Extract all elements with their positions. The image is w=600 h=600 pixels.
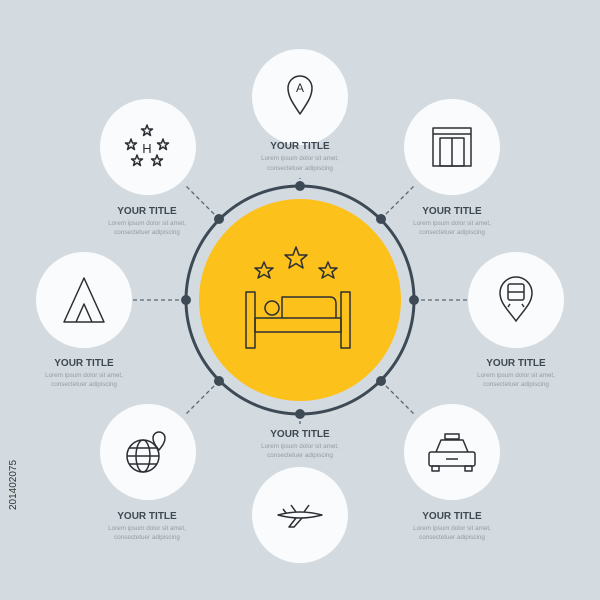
icon: hotel bed with stars — [246, 247, 350, 348]
icon: hotel stars: H — [142, 141, 152, 156]
icon: tent — [64, 278, 104, 322]
text: Lorem ipsum dolor sit amet, — [477, 372, 555, 379]
icon: location pin A — [288, 76, 312, 114]
icon: taxi car — [429, 434, 475, 471]
text: Lorem ipsum dolor sit amet, — [413, 220, 491, 227]
text: YOUR TITLE — [422, 206, 482, 217]
icon: airplane — [278, 505, 322, 527]
icon: elevator — [433, 128, 471, 166]
text: Lorem ipsum dolor sit amet, — [413, 525, 491, 532]
stock id: 201402075 — [8, 460, 19, 510]
text: consectetuer adipiscing — [483, 381, 549, 388]
icon: globe with pin — [127, 432, 165, 472]
text: Lorem ipsum dolor sit amet, — [45, 372, 123, 379]
text: YOUR TITLE — [54, 358, 114, 369]
white circles — [36, 49, 564, 563]
text: YOUR TITLE — [270, 429, 330, 440]
text: Lorem ipsum dolor sit amet, — [108, 220, 186, 227]
text: Lorem ipsum dolor sit amet, — [261, 443, 339, 450]
text blocks: consectetuer adipiscing — [267, 165, 333, 172]
text: YOUR TITLE — [117, 511, 177, 522]
text: consectetuer adipiscing — [114, 534, 180, 541]
text: YOUR TITLE — [486, 358, 546, 369]
text: consectetuer adipiscing — [419, 229, 485, 236]
text: consectetuer adipiscing — [114, 229, 180, 236]
center hub — [181, 181, 419, 419]
icon: hotel stars — [126, 125, 168, 166]
text blocks — [261, 141, 339, 172]
text: Lorem ipsum dolor sit amet, — [108, 525, 186, 532]
text: YOUR TITLE — [117, 206, 177, 217]
text blocks: YOUR TITLE — [270, 141, 330, 152]
text: consectetuer adipiscing — [267, 452, 333, 459]
text blocks: Lorem ipsum dolor sit amet, — [261, 155, 339, 162]
text: consectetuer adipiscing — [419, 534, 485, 541]
icon: location pin A: A — [296, 81, 304, 95]
text: YOUR TITLE — [422, 511, 482, 522]
text: consectetuer adipiscing — [51, 381, 117, 388]
connectors — [132, 178, 467, 424]
icon: train pin — [500, 277, 532, 321]
